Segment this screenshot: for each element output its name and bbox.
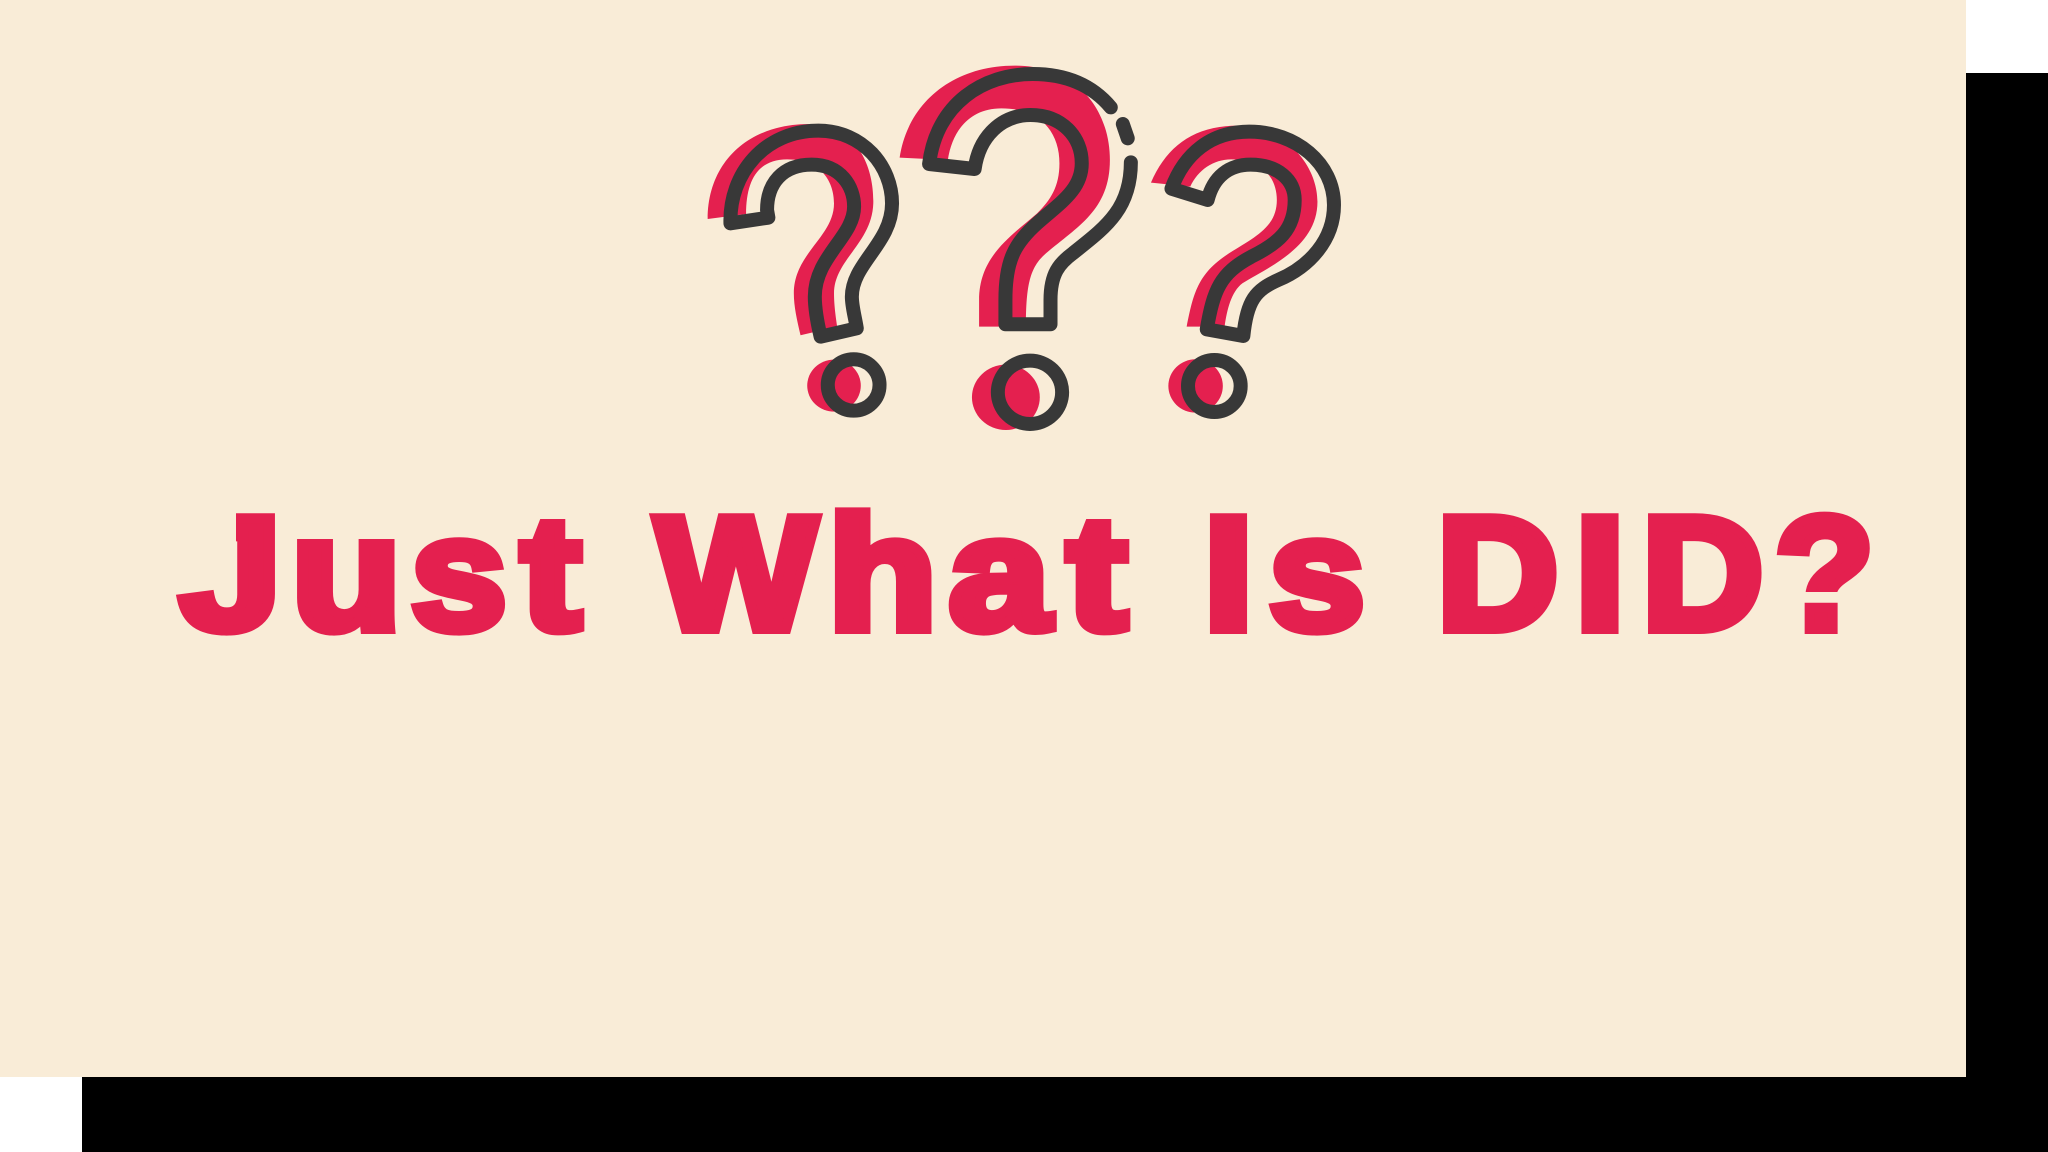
icon: three question marks xyxy=(708,66,1334,430)
title: D xyxy=(1437,484,1558,664)
title: W xyxy=(656,484,817,664)
title: t xyxy=(1067,484,1127,664)
title: u xyxy=(292,484,402,664)
title: a xyxy=(949,484,1052,664)
title: s xyxy=(411,484,507,664)
title: h xyxy=(828,484,937,664)
title: ? xyxy=(1775,484,1874,664)
title: t xyxy=(521,484,581,664)
title: D xyxy=(1642,484,1763,664)
icon: centre question mark xyxy=(900,66,1131,430)
icon: right question mark xyxy=(1151,126,1334,413)
title: I xyxy=(1575,484,1625,664)
title xyxy=(180,484,1874,664)
title: J xyxy=(180,484,282,664)
title: I xyxy=(1204,484,1254,664)
icon: left question mark xyxy=(708,124,892,412)
title: s xyxy=(1269,484,1365,664)
